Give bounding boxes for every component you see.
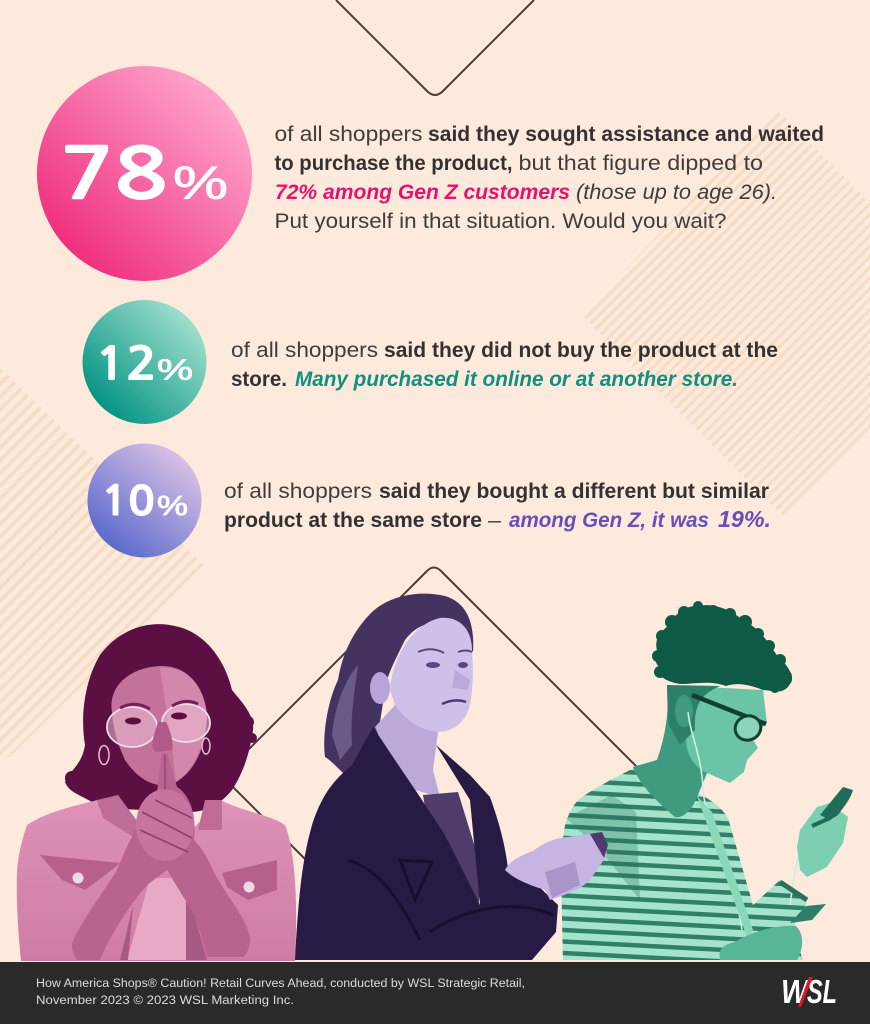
text block: 78% description [274,122,824,233]
neck [375,705,440,797]
circle badge: 78%: 78 [60,140,168,210]
jacket placket [120,885,207,960]
shirt [562,767,807,960]
left pocket [40,855,120,890]
text block: 78% description: of all shoppers [274,122,422,146]
text block: 10% description: product at the same store [224,509,482,532]
circle badge: 10%: 10 [101,481,155,521]
ear [675,695,693,727]
bottom diamond outline [222,568,640,860]
source text [36,976,525,1007]
text block: 12% description: said they did not buy the product at the [384,339,778,362]
stat 12 percent [82,300,778,424]
right pocket [222,860,277,900]
neck shading [633,695,707,817]
text block: 10% description: of all shoppers [224,479,372,503]
WSL logo [781,973,837,1010]
source text: How America Shops® Caution! Retail Curves Ahead, conducted by WSL Strategic Retail, [36,976,525,990]
circle badge: 12%: 12 [95,342,157,386]
finger highlights [140,800,192,852]
text block: 78% description: 72% among Gen Z customers [275,181,570,204]
text block: 78% description: (those up to age 26). [576,180,777,204]
bottle cap [590,832,608,858]
stat 10 percent [88,444,771,558]
circle badge: 12% [82,300,206,424]
text block: 78% description: Put yourself in that situation. Would you wait? [274,209,727,233]
t-shirt [423,792,482,910]
photo: woman in coat (purple duotone) [295,594,608,960]
phone [820,787,853,820]
WSL logo: SL [807,973,837,1010]
source text: November 2023 © 2023 WSL Marketing Inc. [36,993,294,1007]
text block: 10% description: said they bought a different but similar [379,480,769,503]
pocket buttons [72,872,84,884]
text block: 78% description: said they sought assistance and waited [428,123,824,146]
text block: 10% description: – [488,508,501,532]
face [390,618,473,732]
text block: 12% description [231,338,778,391]
hatch pattern: left [0,368,203,757]
circle badge: 78%: % [173,156,228,208]
inner shirt [127,878,186,960]
jacket [17,800,296,961]
sideburn shading [667,685,720,745]
wrist band [780,882,807,900]
circle badge: 10%: % [157,490,188,521]
hair [324,594,473,775]
earphone cable [688,712,800,930]
forearms and hands [72,753,250,960]
sash [697,796,753,940]
head and neck [633,685,767,817]
circle badge: 12%: % [157,354,193,386]
eyes [125,718,141,724]
text block: 10% description: 19%. [718,506,771,532]
hands and bottle [505,834,607,900]
text block: 12% description: Many purchased it online or at another store. [295,368,738,391]
ear [370,672,390,704]
top diamond outline [336,0,534,95]
eyebrows [120,701,198,709]
mouth [442,700,466,704]
ponytail highlight [332,665,358,760]
collar shadow [97,795,222,838]
photo: woman with glasses (pink duotone) [17,624,296,961]
text block: 12% description: store. [231,368,287,391]
glasses [692,695,766,724]
eyes and brows [418,649,472,653]
text block: 10% description: among Gen Z, it was [509,509,709,532]
hair [65,624,257,812]
shoulder shading [566,795,640,900]
text block: 12% description: of all shoppers [231,338,378,362]
text block: 10% description [224,479,771,532]
stat 78 percent [37,66,824,281]
card [790,904,826,923]
circle badge: 78% [37,66,252,281]
lower hand [720,926,802,960]
circle badge: 10% [88,444,202,558]
earrings [99,746,109,764]
hair [652,601,792,693]
photo: man with phone (green duotone) [562,601,853,960]
upper hand [797,803,848,877]
coat folds [348,860,553,940]
nose [152,722,173,752]
WSL logo: W [781,973,810,1010]
finger shadow [812,818,830,826]
bottle label [545,862,580,898]
glasses [107,707,157,747]
coat [295,727,558,960]
text block: 78% description: but that figure dipped to [518,151,763,175]
nose [452,670,470,690]
text block: 78% description: to purchase the product, [274,152,512,175]
face [111,666,207,785]
footer bar [0,962,870,1024]
hatch pattern: right [582,110,870,518]
fist [136,789,194,861]
